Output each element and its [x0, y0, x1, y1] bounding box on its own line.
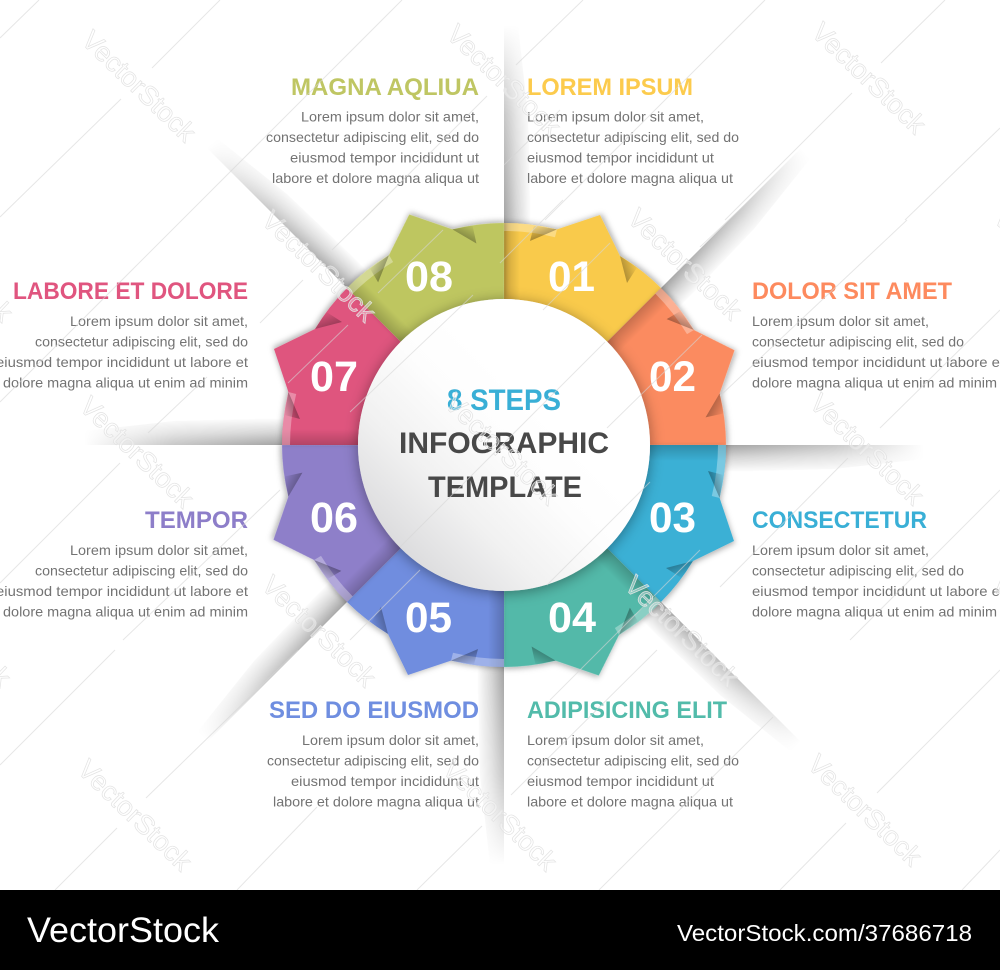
text block: sed do eiusmod: Lorem ipsum dolor sit amet,: [302, 732, 479, 748]
text block: consectetur: consectetur adipiscing elit, sed do: [752, 562, 964, 578]
text block: consectetur: Lorem ipsum dolor sit amet,: [752, 542, 929, 558]
text: VectorStock: [72, 754, 198, 877]
text block: consectetur: dolore magna aliqua ut enim ad minim: [752, 604, 997, 620]
text block: lorem ipsum: LOREM IPSUM: [527, 74, 693, 101]
segment 02: [577, 282, 778, 483]
segment 05: [347, 548, 504, 675]
text block: labore et dolore: Lorem ipsum dolor sit amet,: [70, 313, 248, 329]
text block: lorem ipsum: eiusmod tempor incididunt ut: [527, 150, 714, 166]
text block: lorem ipsum: Lorem ipsum dolor sit amet,: [527, 108, 704, 124]
text: VectorStock: [439, 388, 565, 511]
text block: lorem ipsum: consectetur adipiscing elit, sed do: [527, 129, 739, 145]
radial paper shadows: [84, 25, 924, 865]
text block: dolor sit amet: eiusmod tempor incididunt ut labore et: [752, 354, 1000, 370]
text block: dolor sit amet: [752, 278, 1000, 390]
segment 04: [466, 518, 667, 719]
footer logo: VectorStock: [27, 911, 220, 950]
text: VectorStock: [256, 570, 382, 693]
text block: labore et dolore: [0, 278, 248, 390]
text block: adipisicing elit: eiusmod tempor incididunt ut: [527, 773, 714, 789]
text block: magna aqliua: consectetur adipiscing elit, sed do: [266, 129, 479, 145]
text block: dolor sit amet: consectetur adipiscing elit, sed do: [752, 334, 964, 350]
text block: adipisicing elit: Lorem ipsum dolor sit amet,: [527, 732, 704, 748]
text block: adipisicing elit: consectetur adipiscing elit, sed do: [527, 752, 739, 768]
text: VectorStock: [76, 25, 202, 148]
footer bar: [0, 890, 1000, 970]
centre title: [399, 384, 609, 504]
text block: sed do eiusmod: [267, 697, 479, 810]
text: VectorStock: [802, 749, 928, 872]
text block: labore et dolore: consectetur adipiscing elit, sed do: [35, 334, 248, 350]
text block: lorem ipsum: [527, 74, 739, 186]
text block: adipisicing elit: labore et dolore magna aliqua ut: [527, 794, 733, 810]
text block: magna aqliua: MAGNA AQLIUA: [291, 74, 479, 101]
text block: consectetur: CONSECTETUR: [752, 507, 927, 534]
segment 02: 02: [649, 353, 696, 401]
text block: magna aqliua: [266, 74, 479, 186]
text: VectorStock: [256, 205, 382, 328]
text: VectorStock: [74, 391, 200, 514]
segment 07: [274, 288, 401, 445]
text block: dolor sit amet: Lorem ipsum dolor sit amet,: [752, 313, 929, 329]
text block: labore et dolore: LABORE ET DOLORE: [13, 278, 248, 305]
text block: tempor: consectetur adipiscing elit, sed do: [35, 562, 248, 578]
text block: sed do eiusmod: labore et dolore magna aliqua ut: [273, 794, 479, 810]
segmented ring: [230, 171, 778, 719]
text block: tempor: [0, 507, 248, 620]
segment 06: 06: [310, 494, 358, 542]
text block: adipisicing elit: [527, 697, 739, 810]
text block: consectetur: [752, 507, 1000, 620]
text block: lorem ipsum: labore et dolore magna aliqua ut: [527, 170, 733, 186]
text block: consectetur: eiusmod tempor incididunt ut labore et: [752, 583, 1000, 599]
segment 03: [607, 445, 734, 602]
text block: magna aqliua: eiusmod tempor incididunt ut: [290, 150, 479, 166]
text: VectorStock: [437, 754, 563, 877]
text block: sed do eiusmod: eiusmod tempor incididunt ut: [291, 773, 479, 789]
text: VectorStock: [441, 19, 567, 142]
segment 03: 03: [649, 494, 696, 542]
segment 01: [504, 215, 661, 342]
text: VectorStock: [619, 570, 745, 693]
text block: adipisicing elit: ADIPISICING ELIT: [527, 697, 727, 724]
footer image id: VectorStock.com/37686718: [677, 920, 972, 946]
text block: sed do eiusmod: SED DO EIUSMOD: [269, 697, 479, 724]
centre title: TEMPLATE: [428, 471, 582, 504]
text block: dolor sit amet: DOLOR SIT AMET: [752, 278, 952, 305]
text: VectorStock: [806, 17, 932, 140]
text: VectorStock: [622, 203, 748, 326]
text block: magna aqliua: Lorem ipsum dolor sit amet,: [301, 108, 479, 124]
segment 08: [341, 171, 542, 372]
segment 07: 07: [310, 353, 358, 401]
text block: tempor: Lorem ipsum dolor sit amet,: [70, 542, 248, 558]
text block: dolor sit amet: dolore magna aliqua ut enim ad minim: [752, 374, 997, 390]
text block: labore et dolore: eiusmod tempor incididunt ut labore et: [0, 354, 248, 370]
segment 05: 05: [405, 594, 452, 642]
text block: sed do eiusmod: consectetur adipiscing elit, sed do: [267, 752, 479, 768]
centre circle: [358, 299, 650, 591]
centre title: 8 STEPS: [447, 384, 561, 417]
segment 04: 04: [548, 594, 596, 642]
text block: magna aqliua: labore et dolore magna aliqua ut: [272, 170, 479, 186]
text: VectorStock: [804, 388, 930, 511]
text block: tempor: dolore magna aliqua ut enim ad minim: [3, 604, 248, 620]
text block: labore et dolore: dolore magna aliqua ut enim ad minim: [3, 374, 248, 390]
segment 06: [230, 407, 431, 608]
centre title: INFOGRAPHIC: [399, 427, 609, 460]
text block: tempor: TEMPOR: [145, 507, 248, 534]
segment 01: 01: [548, 253, 595, 301]
segment 08: 08: [405, 253, 453, 301]
text block: tempor: eiusmod tempor incididunt ut labore et: [0, 583, 248, 599]
